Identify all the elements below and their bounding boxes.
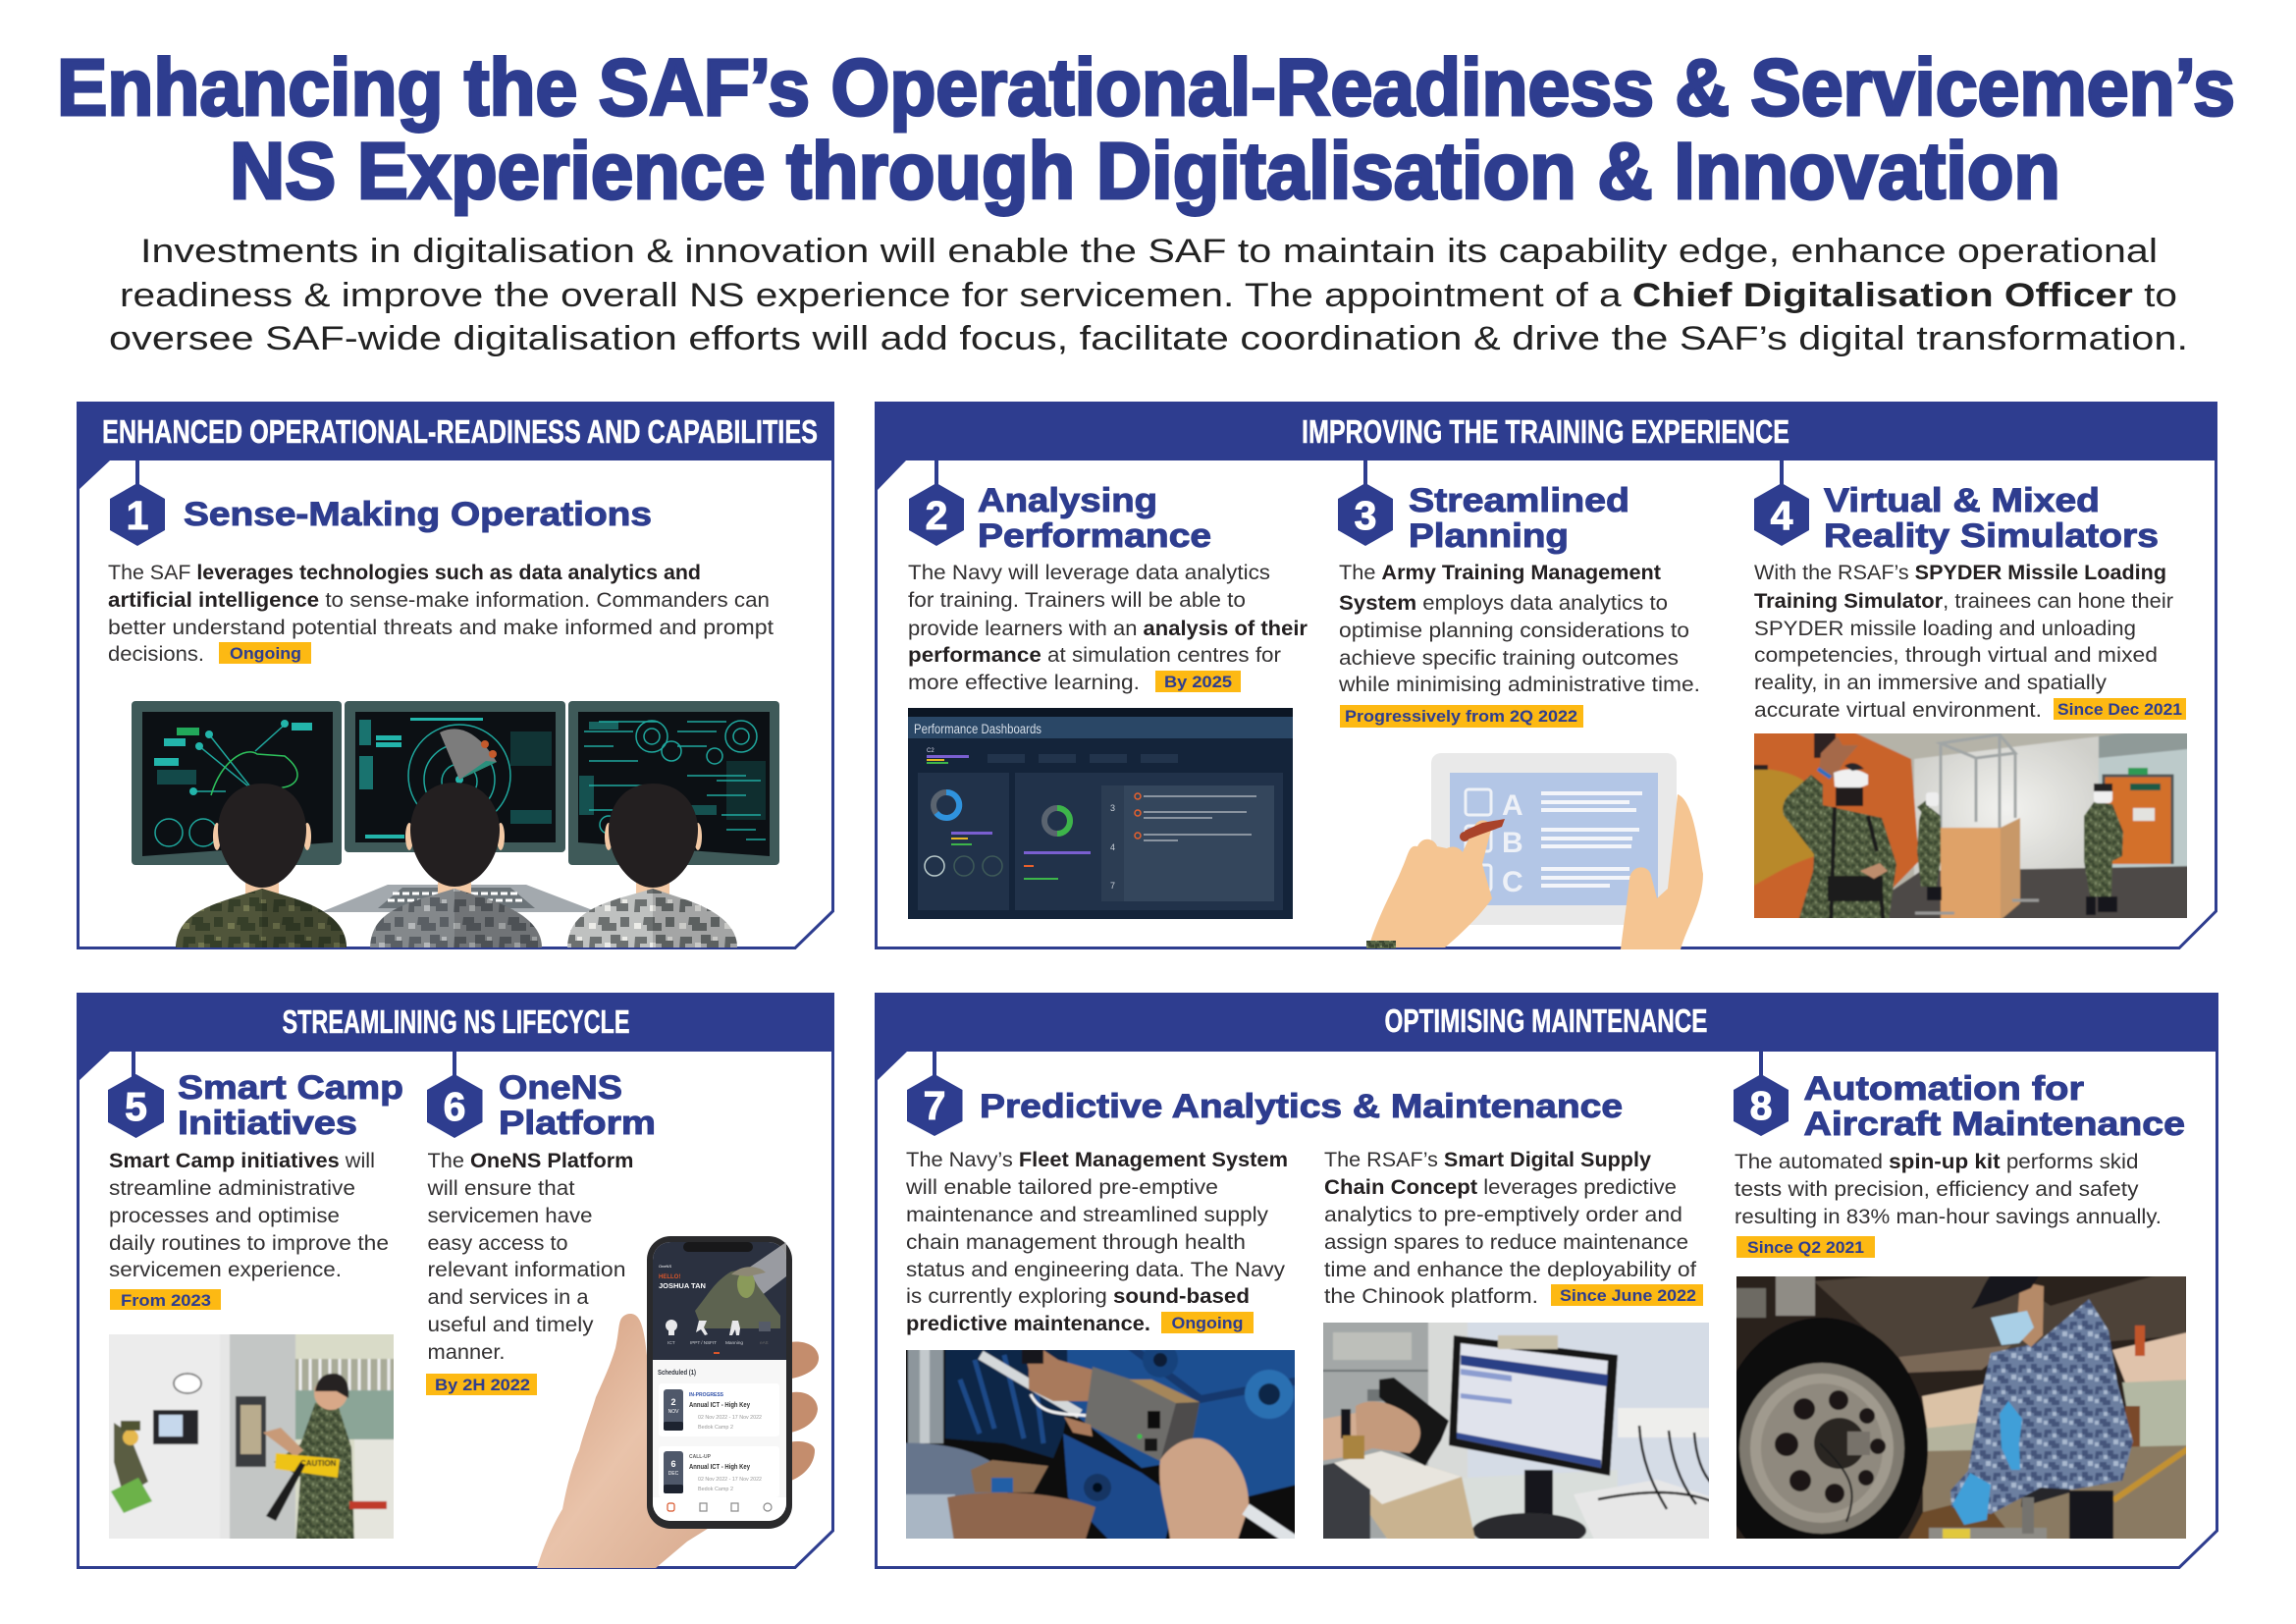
intro text block: oversee SAF-wide digitalisation efforts will add focus, facilitate coordination & drive the SAF’s digital transformation. bbox=[109, 320, 2188, 357]
icon: number 4 hexagon bbox=[1754, 460, 1809, 546]
badge: since Q2 2021: Since Q2 2021 bbox=[1747, 1238, 1864, 1257]
screenshot: performance dashboards bbox=[908, 708, 1293, 919]
badge: by 2025: By 2025 bbox=[1164, 673, 1232, 691]
text: oneNS description: manner. bbox=[428, 1341, 505, 1364]
text: sense-making description: better understand potential threats and make informed and prompt bbox=[108, 617, 774, 639]
text: fleet management description: The Navy’s Fleet Management System bbox=[906, 1149, 1288, 1171]
illustration: hand holding phone with OneNS app: HELLO! bbox=[659, 1274, 680, 1280]
text: smart camp description: servicemen experience. bbox=[109, 1259, 342, 1281]
text: streamlined planning description: The Army Training Management bbox=[1339, 562, 1661, 584]
heading: automation for aircraft maintenance bbox=[1804, 1070, 2185, 1143]
text: simulators description bbox=[1754, 562, 2173, 722]
text: streamlined planning description: while minimising administrative time. bbox=[1338, 674, 1700, 696]
panel: enhanced operational-readiness and capabilities bbox=[77, 402, 834, 948]
illustration: hand holding phone with OneNS app: Annual ICT - High Key bbox=[689, 1462, 751, 1471]
title: NS Experience through Digitalisation & Innovation bbox=[230, 127, 2060, 216]
text: streamlined planning description bbox=[1338, 562, 1700, 696]
text: analysing performance description: performance at simulation centres for bbox=[908, 644, 1281, 667]
text: smart digital supply chain description: The RSAF’s Smart Digital Supply bbox=[1324, 1149, 1651, 1171]
icon: number 7 hexagon: 7 bbox=[924, 1083, 945, 1128]
photo: serviceman with aircraft wheel bbox=[1716, 1267, 2196, 1579]
text: analysing performance description bbox=[908, 562, 1308, 694]
illustration: hand holding phone with OneNS app: NOV bbox=[668, 1409, 679, 1415]
text: spin-up kit description: The automated spin-up kit performs skid bbox=[1735, 1151, 2138, 1173]
text: smart digital supply chain description: assign spares to reduce maintenance bbox=[1324, 1231, 1688, 1254]
icon: number 3 hexagon: 3 bbox=[1355, 493, 1376, 538]
illustration: hand holding phone with OneNS app bbox=[537, 1236, 819, 1568]
badge: since june 2022: Since June 2022 bbox=[1560, 1286, 1696, 1305]
text: smart digital supply chain description bbox=[1324, 1149, 1696, 1308]
heading: oneNS platform: Platform bbox=[499, 1105, 656, 1142]
panel: streamlining NS lifecycle bbox=[77, 993, 834, 1568]
text: smart camp description: processes and optimise bbox=[109, 1205, 340, 1227]
text: oneNS description: will ensure that bbox=[426, 1177, 575, 1200]
heading: analysing performance: Analysing bbox=[978, 482, 1157, 519]
illustration: hand on tablet bbox=[1366, 753, 1703, 949]
text: smart digital supply chain description: Chain Concept leverages predictive bbox=[1324, 1176, 1677, 1199]
badge: ongoing bbox=[219, 642, 311, 664]
panel: improving the training experience bbox=[875, 402, 2217, 949]
heading: optimising maintenance: OPTIMISING MAINTENANCE bbox=[1384, 1002, 1708, 1039]
heading: smart camp initiatives: Smart Camp bbox=[178, 1069, 403, 1107]
text: oneNS description: useful and timely bbox=[428, 1314, 594, 1336]
icon: number 6 hexagon bbox=[427, 1052, 483, 1138]
illustration: hand holding phone with OneNS app: Scheduled (1) bbox=[658, 1370, 696, 1377]
heading: streamlined planning bbox=[1409, 482, 1629, 555]
text: fleet management description: chain management through health bbox=[906, 1231, 1246, 1254]
icon: number 6 hexagon: 6 bbox=[444, 1084, 465, 1129]
text: analysing performance description: for training. Trainers will be able to bbox=[908, 589, 1246, 612]
illustration: hand holding phone with OneNS app: DEC bbox=[668, 1471, 679, 1477]
illustration: hand on tablet: A bbox=[1502, 789, 1523, 822]
heading: automation for aircraft maintenance: Automation for bbox=[1804, 1070, 2084, 1108]
icon: number 8 hexagon bbox=[1734, 1052, 1789, 1136]
badge: ongoing: Ongoing bbox=[1172, 1314, 1243, 1332]
icon: number 5 hexagon bbox=[108, 1052, 164, 1138]
illustration: hand holding phone with OneNS app: 2 bbox=[670, 1397, 676, 1407]
text: sense-making description: artificial intelligence to sense-make information. Commanders can bbox=[108, 589, 770, 612]
text: analysing performance description: more effective learning. bbox=[908, 672, 1140, 694]
icon: number 7 hexagon bbox=[907, 1052, 962, 1136]
text: simulators description: competencies, through virtual and mixed bbox=[1754, 644, 2158, 667]
intro text block: Investments in digitalisation & innovation will enable the SAF to maintain its capability edge, enhance operational bbox=[140, 233, 2158, 270]
text: simulators description: Training Simulator , trainees can hone their bbox=[1754, 590, 2173, 613]
badge: ongoing: Ongoing bbox=[230, 644, 301, 663]
text: sense-making description: The SAF leverages technologies such as data analytics and bbox=[108, 562, 701, 584]
heading: improving the training experience: IMPROVING THE TRAINING EXPERIENCE bbox=[1302, 413, 1789, 450]
text: simulators description: reality, in an immersive and spatially bbox=[1754, 672, 2108, 694]
heading: predictive analytics and maintenance: Predictive Analytics & Maintenance bbox=[980, 1088, 1623, 1125]
badge: progressively from 2Q 2022: Progressively from 2Q 2022 bbox=[1345, 707, 1577, 726]
title bbox=[57, 43, 2235, 216]
heading: streamlined planning: Planning bbox=[1409, 517, 1569, 555]
text: spin-up kit description: tests with precision, efficiency and safety bbox=[1735, 1178, 2139, 1201]
photo: VR simulator training bbox=[1744, 724, 2197, 928]
screenshot: performance dashboards: C2 bbox=[927, 748, 934, 754]
text: streamlined planning description: optimise planning considerations to bbox=[1339, 620, 1689, 642]
text: spin-up kit description: resulting in 83% man-hour savings annually. bbox=[1735, 1206, 2162, 1228]
intro text block bbox=[109, 233, 2188, 357]
heading: sense-making operations: Sense-Making Operations bbox=[184, 496, 652, 533]
badge: from 2023: From 2023 bbox=[121, 1291, 211, 1310]
badge: from 2023 bbox=[110, 1289, 221, 1310]
text: smart camp description: streamline administrative bbox=[109, 1177, 355, 1200]
heading: streamlining NS lifecycle: STREAMLINING NS LIFECYCLE bbox=[283, 1003, 630, 1040]
screenshot: performance dashboards: 4 bbox=[1110, 842, 1115, 852]
text: sense-making description bbox=[108, 562, 774, 666]
screenshot: performance dashboards: 3 bbox=[1110, 803, 1115, 813]
illustration: hand holding phone with OneNS app: JOSHUA TAN bbox=[659, 1281, 706, 1290]
text: smart digital supply chain description: time and enhance the deployability of bbox=[1324, 1259, 1696, 1281]
photo: smart camp kiosk: CAUTION bbox=[300, 1459, 337, 1468]
text: oneNS description: The OneNS Platform bbox=[428, 1150, 634, 1172]
icon: number 3 hexagon bbox=[1338, 460, 1393, 546]
illustration: hand holding phone with OneNS app: 02 Nov 2022 - 17 Nov 2022 bbox=[698, 1477, 762, 1483]
text: oneNS description: and services in a bbox=[428, 1286, 589, 1309]
illustration: hand holding phone with OneNS app: IN-PROGRESS bbox=[689, 1392, 724, 1398]
heading: automation for aircraft maintenance: Aircraft Maintenance bbox=[1804, 1106, 2185, 1143]
heading: oneNS platform bbox=[499, 1069, 656, 1142]
illustration: hand holding phone with OneNS app: Bedok Camp 2 bbox=[698, 1425, 733, 1431]
illustration: hand holding phone with OneNS app: IPPT / NSFIT bbox=[690, 1340, 717, 1346]
text: fleet management description: status and engineering data. The Navy bbox=[906, 1259, 1286, 1281]
text: fleet management description: predictive maintenance. bbox=[906, 1313, 1150, 1335]
screenshot: performance dashboards: Performance Dashboards bbox=[914, 722, 1041, 736]
heading: virtual and mixed reality simulators: Reality Simulators bbox=[1824, 517, 2159, 555]
screenshot: performance dashboards: 7 bbox=[1110, 881, 1115, 891]
text: smart camp description: daily routines to improve the bbox=[109, 1232, 389, 1255]
heading: smart camp initiatives bbox=[178, 1069, 403, 1142]
icon: number 5 hexagon: 5 bbox=[125, 1084, 147, 1129]
badge: by 2025 bbox=[1155, 671, 1241, 692]
photo: sound-based maintenance device on engine bbox=[896, 1340, 1305, 1548]
illustration: hand holding phone with OneNS app: ICT bbox=[667, 1340, 675, 1346]
text: oneNS description bbox=[426, 1150, 634, 1364]
badge: by 2H 2022 bbox=[426, 1374, 537, 1395]
heading: analysing performance bbox=[978, 482, 1211, 555]
photo: barcode scanner and monitor bbox=[1313, 1313, 1719, 1548]
illustration: hand holding phone with OneNS app: Annual ICT - High Key bbox=[689, 1400, 751, 1409]
text: oneNS description: relevant information bbox=[428, 1259, 626, 1281]
illustration: hand holding phone with OneNS app: 6 bbox=[670, 1459, 676, 1469]
heading: virtual and mixed reality simulators: Virtual & Mixed bbox=[1824, 482, 2100, 519]
icon: number 2 hexagon bbox=[909, 460, 964, 546]
text: analysing performance description: provide learners with an analysis of their bbox=[908, 618, 1308, 640]
illustration: hand holding phone with OneNS app: Bedok Camp 2 bbox=[698, 1487, 733, 1492]
text: oneNS description: easy access to bbox=[428, 1232, 567, 1255]
text: simulators description: With the RSAF’s SPYDER Missile Loading bbox=[1754, 562, 2166, 584]
text: fleet management description: will enable tailored pre-emptive bbox=[905, 1176, 1218, 1199]
badge: since dec 2021: Since Dec 2021 bbox=[2057, 700, 2182, 719]
text: smart digital supply chain description: the Chinook platform. bbox=[1324, 1285, 1538, 1308]
icon: number 8 hexagon: 8 bbox=[1750, 1083, 1772, 1128]
icon: number 1 hexagon: 1 bbox=[127, 493, 148, 538]
badge: ongoing bbox=[1161, 1312, 1254, 1333]
illustration: hand holding phone with OneNS app: CALL-UP bbox=[689, 1454, 712, 1460]
text: smart camp description bbox=[109, 1150, 389, 1281]
text: smart digital supply chain description: analytics to pre-emptively order and bbox=[1324, 1204, 1682, 1226]
heading: enhanced operational-readiness: ENHANCED OPERATIONAL-READINESS AND CAPABILITIES bbox=[102, 413, 818, 450]
text: streamlined planning description: achieve specific training outcomes bbox=[1339, 647, 1679, 670]
text: oneNS description: servicemen have bbox=[428, 1205, 593, 1227]
text: analysing performance description: The Navy will leverage data analytics bbox=[908, 562, 1270, 584]
illustration: hand holding phone with OneNS app: eAtt bbox=[760, 1340, 769, 1346]
icon: number 1 hexagon bbox=[110, 460, 165, 546]
icon: number 4 hexagon: 4 bbox=[1771, 493, 1793, 538]
intro text block: readiness & improve the overall NS experience for servicemen. The appointment of a Chief Digitalisation Officer to bbox=[120, 277, 2177, 314]
illustration: hand holding phone with OneNS app: OneNS bbox=[659, 1264, 671, 1269]
photo: smart camp kiosk bbox=[99, 1325, 403, 1548]
heading: virtual and mixed reality simulators bbox=[1824, 482, 2159, 555]
text: simulators description: accurate virtual environment. bbox=[1754, 699, 2042, 722]
text: spin-up kit description bbox=[1735, 1151, 2162, 1228]
text: simulators description: SPYDER missile loading and unloading bbox=[1754, 618, 2136, 640]
icon: number 2 hexagon: 2 bbox=[926, 493, 947, 538]
illustration: hand on tablet: C bbox=[1502, 866, 1523, 898]
illustration: hand holding phone with OneNS app: Manning bbox=[725, 1340, 743, 1346]
heading: oneNS platform: OneNS bbox=[499, 1069, 622, 1107]
illustration: three servicemen at monitors bbox=[132, 701, 779, 947]
illustration: hand on tablet: B bbox=[1502, 827, 1523, 859]
heading: analysing performance: Performance bbox=[978, 517, 1211, 555]
text: fleet management description: maintenance and streamlined supply bbox=[906, 1204, 1269, 1226]
panel: optimising maintenance bbox=[875, 993, 2218, 1579]
text: smart camp description: Smart Camp initiatives will bbox=[109, 1150, 375, 1172]
heading: streamlined planning: Streamlined bbox=[1409, 482, 1629, 519]
text: fleet management description: is currently exploring sound-based bbox=[906, 1285, 1250, 1308]
text: fleet management description bbox=[905, 1149, 1288, 1335]
heading: smart camp initiatives: Initiatives bbox=[178, 1105, 357, 1142]
text: sense-making description: decisions. bbox=[108, 643, 204, 666]
text: streamlined planning description: System employs data analytics to bbox=[1339, 592, 1668, 615]
badge: by 2H 2022: By 2H 2022 bbox=[435, 1376, 530, 1394]
illustration: hand holding phone with OneNS app: 02 Nov 2022 - 17 Nov 2022 bbox=[698, 1415, 762, 1421]
